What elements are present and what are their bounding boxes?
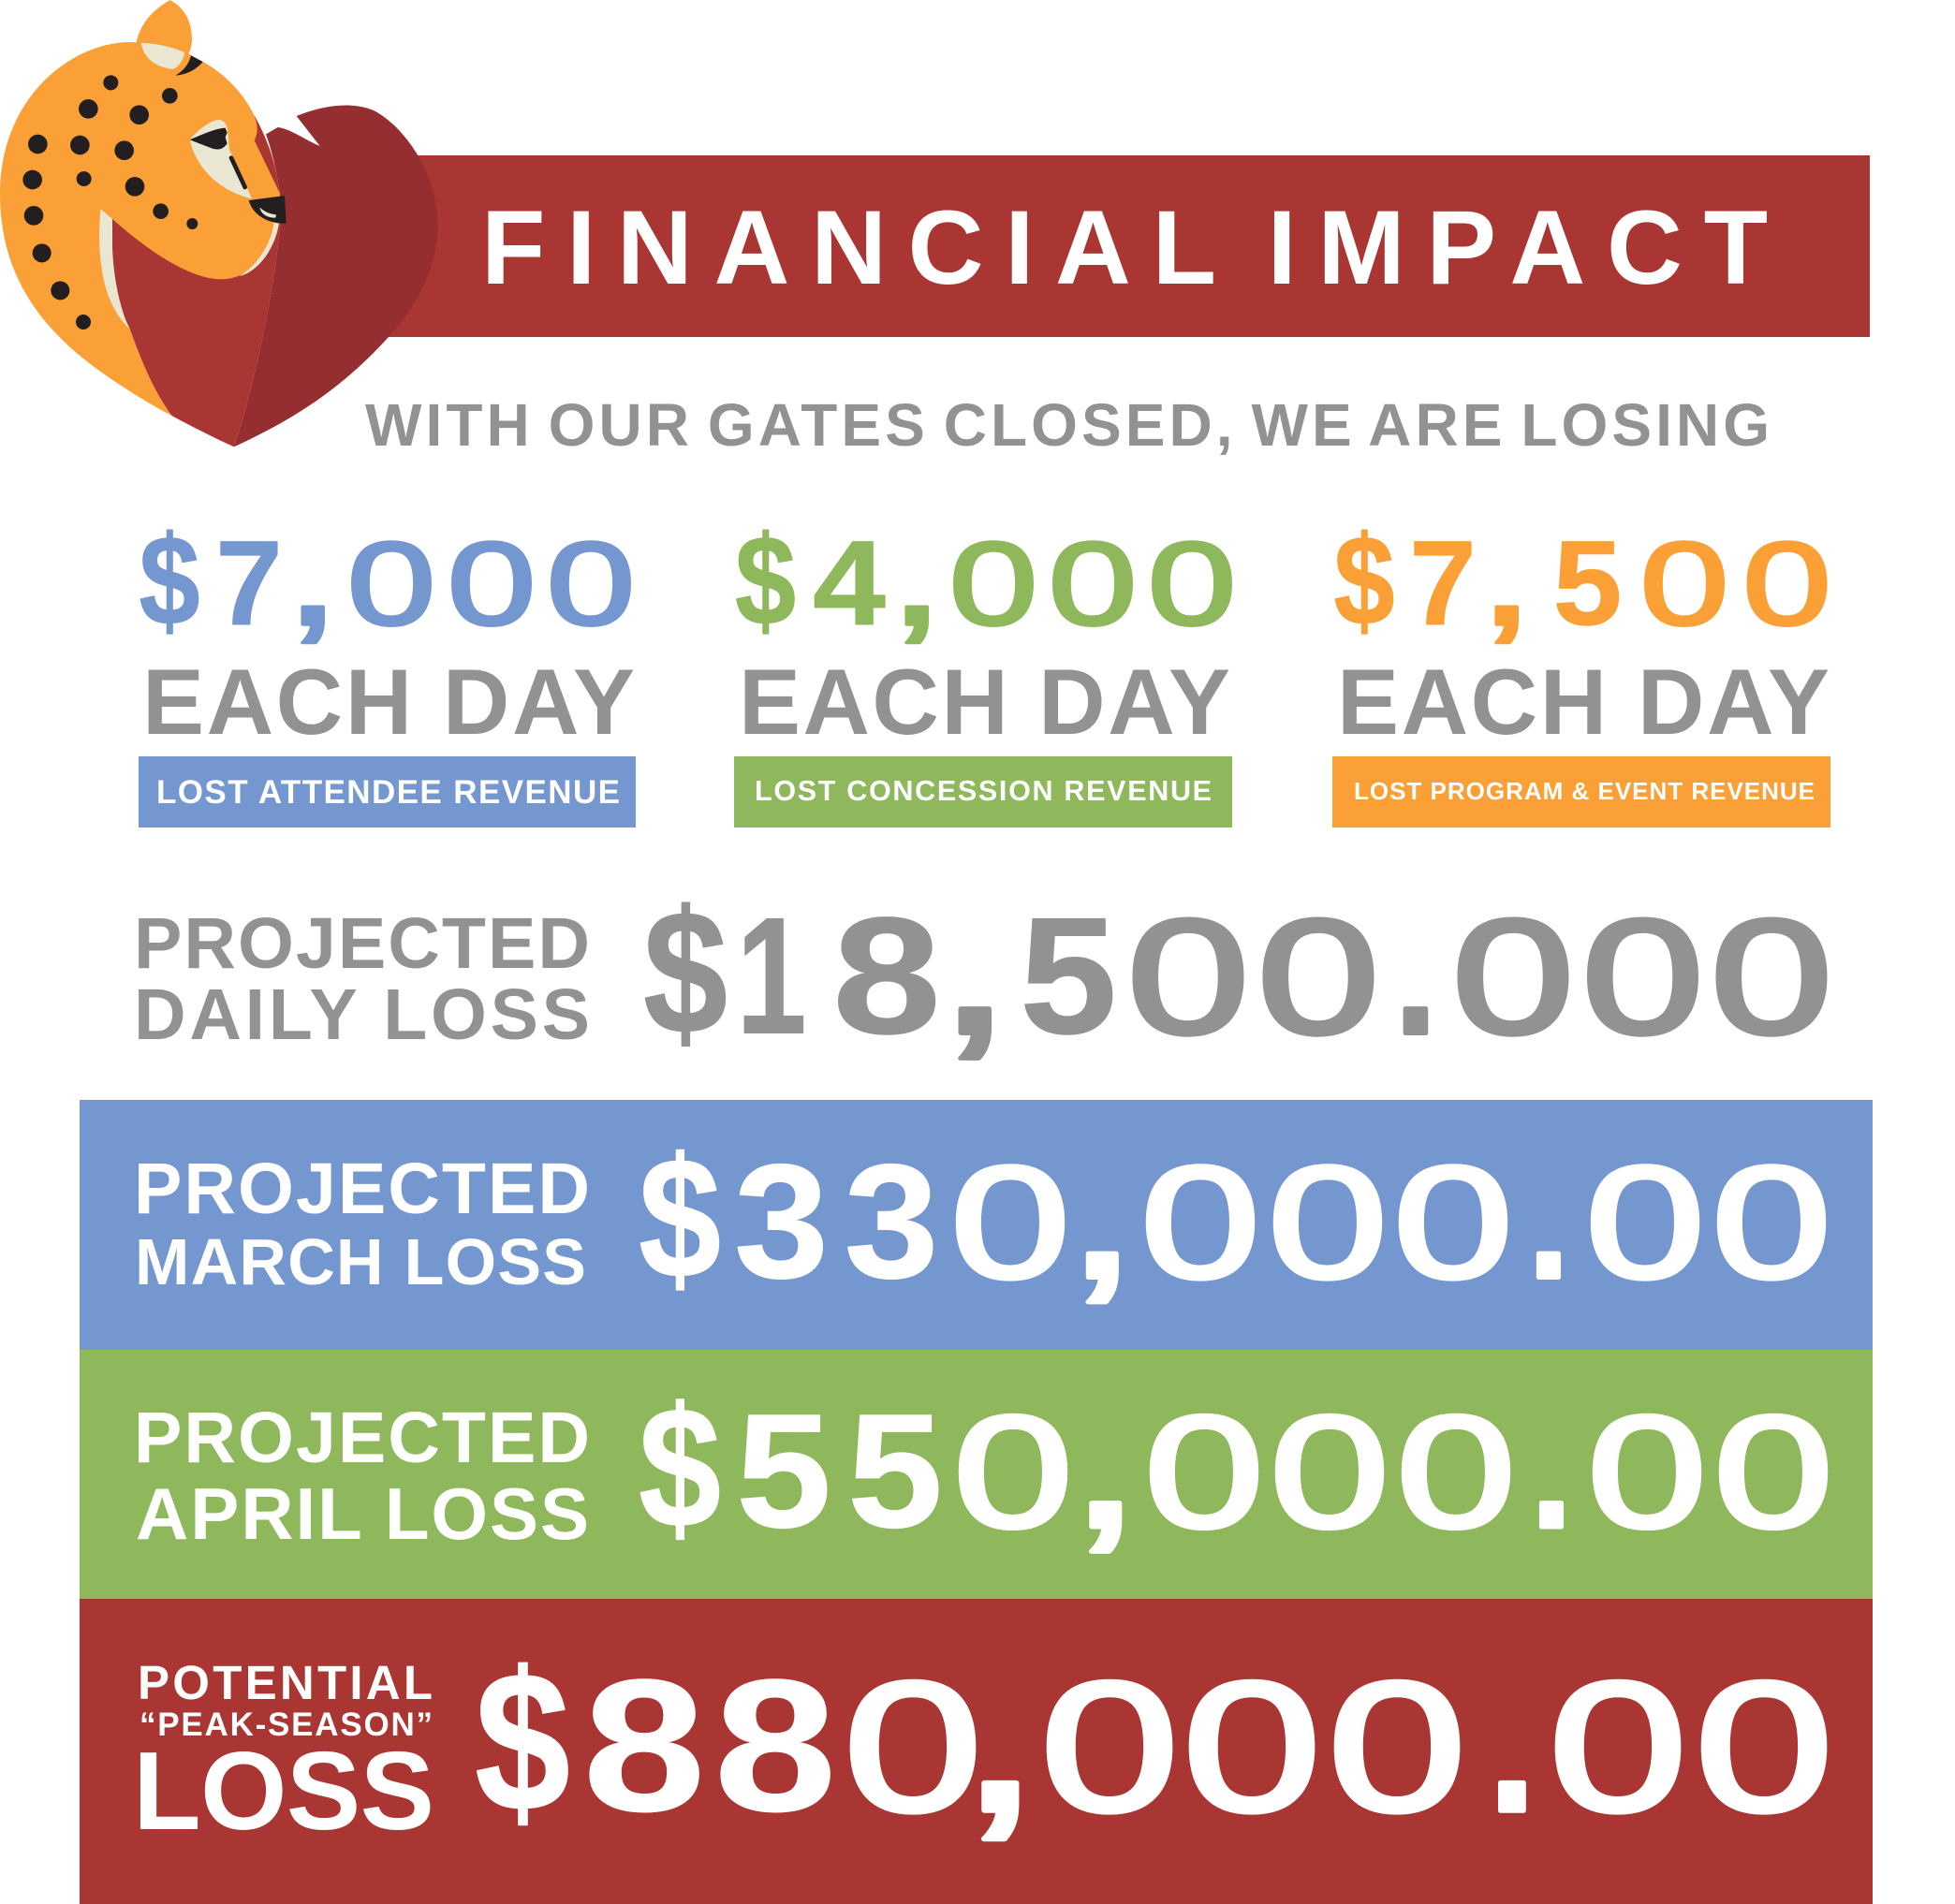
amount: 0 bbox=[1695, 1644, 1833, 1850]
amount: 0 bbox=[1452, 886, 1574, 1067]
label: MARCH LOSS bbox=[135, 1225, 586, 1298]
header banner bbox=[281, 155, 1870, 337]
label: APRIL LOSS bbox=[136, 1472, 589, 1555]
chin highlight bbox=[240, 222, 278, 276]
amount: 5 bbox=[847, 1380, 943, 1561]
amount: 7,500: 7 bbox=[1409, 517, 1477, 651]
eye bbox=[190, 128, 228, 150]
amount: 7,000: 0 bbox=[547, 518, 635, 650]
amount: 7,000: 0 bbox=[448, 518, 536, 650]
label: PROJECTED bbox=[134, 1398, 590, 1478]
amount: 8 bbox=[713, 1640, 837, 1851]
amount: 3 bbox=[845, 1131, 938, 1312]
amount: , bbox=[1075, 1135, 1129, 1312]
amount: 7,500: 5 bbox=[1553, 517, 1622, 651]
stat: program and event revenue bbox=[1332, 509, 1831, 828]
amount: 4,000: 0 bbox=[1148, 518, 1236, 650]
label: DAILY LOSS bbox=[134, 974, 590, 1055]
amount: 0 bbox=[1328, 1644, 1466, 1850]
heart left lobe bbox=[112, 115, 280, 447]
amount: $ bbox=[643, 874, 728, 1071]
tear line bbox=[231, 158, 245, 187]
ear shadow bbox=[175, 55, 203, 76]
stat: attendee revenue bbox=[139, 509, 636, 828]
amount: 4,000: , bbox=[897, 518, 936, 650]
amount: , bbox=[1079, 1384, 1132, 1561]
amount: 7,000: 7 bbox=[215, 517, 283, 651]
amount: . bbox=[1529, 1135, 1568, 1312]
label bbox=[134, 903, 590, 1055]
amount: 0 bbox=[1268, 1135, 1388, 1312]
label: POTENTIAL bbox=[138, 1656, 433, 1709]
amount: 0 bbox=[1712, 1135, 1831, 1312]
amount: , bbox=[969, 1644, 1031, 1850]
amount: 0 bbox=[1040, 1644, 1179, 1850]
amount: $ bbox=[639, 1121, 721, 1314]
label: “PEAK-SEASON” bbox=[140, 1706, 433, 1743]
amount: 0 bbox=[1587, 1384, 1707, 1561]
tag: LOST ATTENDEE REVENUE bbox=[156, 774, 620, 811]
amount: 8 bbox=[582, 1640, 706, 1851]
label bbox=[134, 1398, 590, 1555]
each day label: EACH DAY bbox=[142, 650, 635, 754]
amount: 7,500: 0 bbox=[1742, 518, 1831, 650]
amount: 0 bbox=[1713, 1384, 1833, 1561]
each day label: EACH DAY bbox=[1337, 650, 1830, 754]
each day label: EACH DAY bbox=[739, 650, 1230, 754]
amount: 0 bbox=[1270, 1384, 1389, 1561]
amount: 4,000: 0 bbox=[1049, 518, 1137, 650]
amount: 0 bbox=[1711, 886, 1832, 1067]
tag bbox=[734, 756, 1232, 828]
amount: 0 bbox=[1549, 1644, 1687, 1850]
amount: $ bbox=[639, 1371, 721, 1563]
amount: 7,000: 0 bbox=[347, 518, 435, 650]
amount: 0 bbox=[950, 1135, 1070, 1312]
amount: 0 bbox=[1393, 1135, 1513, 1312]
amount: 0 bbox=[844, 1644, 982, 1850]
amount: 0 bbox=[953, 1384, 1073, 1561]
amount: 0 bbox=[1183, 1644, 1321, 1850]
icon: cheetah and heart bbox=[0, 0, 438, 447]
panel: potential peak-season loss bbox=[80, 1599, 1873, 1904]
tag bbox=[1332, 756, 1830, 828]
amount: 7,500: , bbox=[1487, 518, 1526, 650]
neck highlight bbox=[99, 209, 129, 329]
stat: concession revenue bbox=[734, 509, 1236, 828]
spots bbox=[22, 75, 198, 330]
amount: 4,000: $ bbox=[735, 509, 796, 652]
amount: 5 bbox=[736, 1380, 831, 1561]
inner ear bbox=[141, 43, 184, 69]
title: FINANCIAL IMPACT bbox=[481, 189, 1768, 306]
nose bbox=[249, 196, 287, 224]
amount: 0 bbox=[1585, 1135, 1705, 1312]
tag bbox=[139, 756, 636, 828]
amount: 0 bbox=[1127, 886, 1249, 1067]
tag: LOST CONCESSION REVENUE bbox=[755, 775, 1212, 807]
label bbox=[133, 1656, 434, 1853]
amount: 7,000: , bbox=[293, 518, 332, 650]
amount: 7,500: 0 bbox=[1640, 518, 1728, 650]
amount: 0 bbox=[1140, 1135, 1260, 1312]
cheetah ear bbox=[137, 0, 192, 69]
amount: $ bbox=[475, 1631, 570, 1853]
subtitle: WITH OUR GATES CLOSED, WE ARE LOSING bbox=[365, 391, 1770, 459]
nose highlight bbox=[259, 208, 276, 218]
tag: LOST PROGRAM & EVENT REVENUE bbox=[1354, 777, 1815, 805]
amount: . bbox=[1489, 1644, 1536, 1850]
amount: , bbox=[948, 886, 1002, 1067]
amount: 0 bbox=[1144, 1384, 1264, 1561]
amount: 0 bbox=[1396, 1384, 1516, 1561]
amount: . bbox=[1395, 886, 1436, 1067]
label: PROJECTED bbox=[134, 1149, 590, 1229]
amount: . bbox=[1532, 1384, 1571, 1561]
amount: 0 bbox=[1581, 886, 1704, 1067]
label: LOSS bbox=[133, 1729, 434, 1853]
amount: 5 bbox=[1020, 882, 1117, 1069]
panel: projected march loss bbox=[80, 1100, 1873, 1350]
amount: 7,500: $ bbox=[1333, 509, 1395, 652]
amount: 8 bbox=[832, 882, 941, 1069]
cheetah head and neck bbox=[0, 42, 280, 416]
label bbox=[134, 1149, 590, 1298]
label: PROJECTED bbox=[134, 903, 590, 984]
amount: 4,000: 4 bbox=[813, 517, 886, 651]
amount: 1 bbox=[736, 882, 807, 1069]
amount: 3 bbox=[734, 1131, 829, 1312]
eye patch bbox=[190, 120, 252, 199]
amount: 7,000: $ bbox=[139, 509, 200, 652]
heart right lobe bbox=[234, 105, 438, 447]
panel: projected april loss bbox=[80, 1350, 1873, 1599]
amount: 4,000: 0 bbox=[949, 518, 1037, 650]
amount: 0 bbox=[1257, 886, 1379, 1067]
row: projected daily loss bbox=[134, 874, 1832, 1071]
